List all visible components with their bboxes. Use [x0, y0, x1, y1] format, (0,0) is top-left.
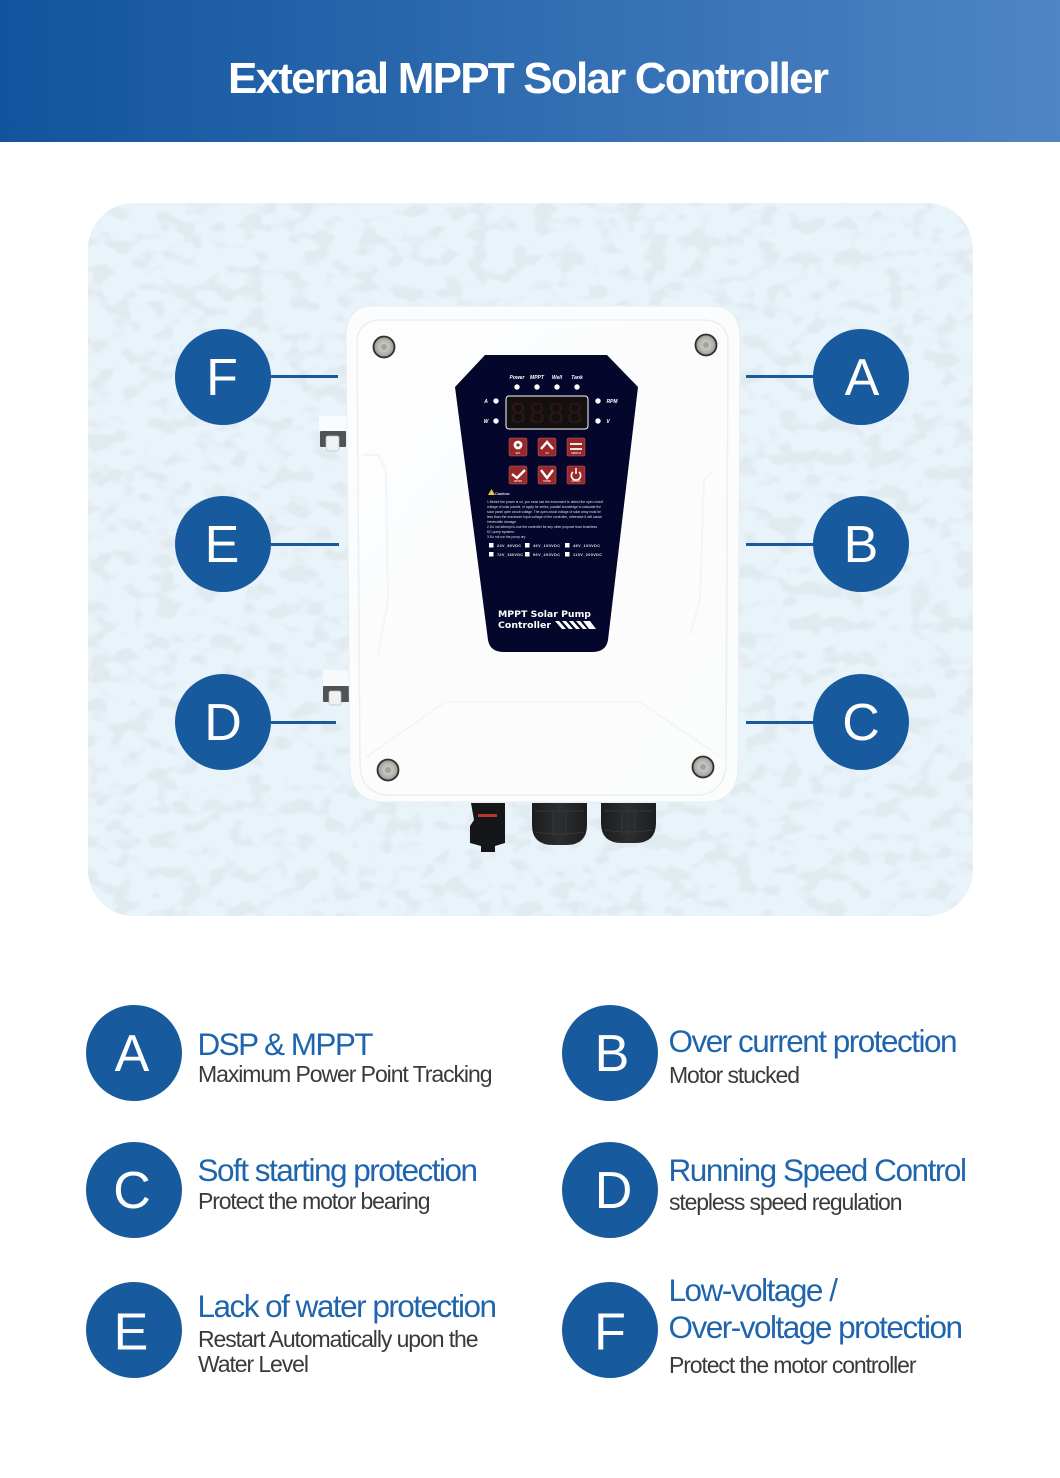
caution icon: [488, 489, 495, 495]
callout: D: D: [204, 694, 242, 752]
control buttons: UP: [545, 452, 549, 455]
feature A: Maximum Power Point Tracking: [198, 1061, 492, 1087]
indicator labels: MPPT: [530, 375, 545, 381]
caution text: voltage of solar panels, or apply for series, parallel knowledge to calculate the: [487, 505, 601, 509]
callout: E: E: [205, 516, 239, 574]
product name: MPPT Solar Pump: [498, 610, 591, 620]
feature A: DSP & MPPT: [198, 1026, 374, 1062]
control buttons: [509, 438, 585, 484]
voltage options: 72V_150VDC: [497, 553, 523, 557]
product: solar controller device: [319, 306, 740, 852]
feature D: stepless speed regulation: [669, 1189, 902, 1215]
enclosure body: [346, 306, 740, 802]
feature B: [562, 1005, 958, 1101]
voltage options: 36V_100VDC: [533, 544, 560, 548]
callout: F: F: [206, 349, 238, 407]
indicator labels: Tank: [571, 375, 583, 381]
caution text: [487, 492, 603, 539]
feature F: Protect the motor controller: [669, 1352, 917, 1378]
feature C: Soft starting protection: [198, 1152, 478, 1188]
title: External MPPT Solar Controller: [228, 54, 829, 103]
callout: D: [175, 674, 336, 770]
feature D: [562, 1142, 967, 1238]
panel: product image background: [88, 203, 973, 916]
product name: [498, 610, 596, 631]
callout: C: [746, 674, 909, 770]
voltage options: 96V_200VDC: [533, 553, 560, 557]
header banner: [0, 0, 1060, 142]
callout: E: [175, 496, 339, 592]
control buttons: ENTER: [514, 480, 522, 483]
callout: B: B: [844, 516, 878, 574]
feature E: Restart Automatically upon the: [198, 1326, 478, 1352]
feature F: Low-voltage /: [668, 1272, 838, 1308]
callout: F: [175, 329, 338, 425]
left mounting lugs: [319, 416, 351, 705]
enclosure inner lid: [357, 320, 728, 795]
voltage options: 48V_100VDC: [573, 544, 600, 548]
caution text: 2.Do not attempt to use the controller for any other purpose than brushless: [487, 525, 597, 529]
voltage options: 24V_80VDC: [497, 544, 521, 548]
indicator lights: [493, 384, 601, 424]
indicator labels: Well: [552, 375, 563, 381]
caution text: irreversible damage.: [487, 520, 517, 524]
caution text: less than the maximum input voltage of the controller, otherwise it will cause: [487, 515, 602, 519]
indicator labels: Power: [509, 375, 526, 381]
feature F: F: [594, 1304, 626, 1362]
control buttons: SWITCH: [571, 452, 581, 455]
feature E: [86, 1282, 497, 1378]
feature E: Water Level: [198, 1351, 309, 1377]
caution text: 1.Before the power is on, you must use the instrument to detect the open circuit: [487, 500, 603, 504]
feature F: Over-voltage protection: [668, 1309, 963, 1345]
callout: A: A: [845, 349, 880, 407]
caution text: DC pump systems.: [487, 530, 515, 534]
control buttons: SET: [516, 452, 521, 455]
feature C: [86, 1142, 478, 1238]
lid moulded ridges: [362, 455, 722, 758]
control buttons: ON/OFF: [571, 480, 581, 483]
feature C: Protect the motor bearing: [198, 1188, 430, 1214]
feature A: A: [115, 1025, 150, 1083]
feature E: E: [114, 1304, 148, 1362]
feature B: B: [595, 1025, 629, 1083]
bottom connectors: [470, 803, 656, 852]
voltage options: [489, 543, 602, 557]
feature F: [562, 1272, 963, 1378]
feature B: Motor stucked: [669, 1062, 800, 1088]
feature B: Over current protection: [668, 1023, 958, 1059]
callout: B: [746, 496, 909, 592]
feature E: Lack of water protection: [198, 1288, 497, 1324]
LED display: 8888: [510, 398, 583, 430]
indicator labels: [483, 375, 618, 425]
caution text: Caution:: [495, 492, 510, 496]
indicator labels: RPM: [606, 399, 618, 405]
indicator labels: V: [606, 419, 610, 425]
feature D: D: [595, 1162, 632, 1220]
feature C: C: [113, 1162, 151, 1220]
callout: C: C: [842, 694, 880, 752]
feature A: [86, 1005, 492, 1101]
voltage options: 110V_200VDC: [573, 553, 602, 557]
indicator labels: W: [484, 419, 490, 425]
indicator labels: A: [483, 399, 488, 405]
feature D: Running Speed Control: [668, 1152, 967, 1188]
screws: [374, 334, 716, 780]
caution text: 3.Do not run the pump dry.: [487, 535, 526, 539]
callout: A: [746, 329, 909, 425]
product name: Controller: [498, 621, 552, 631]
control buttons: DOWN: [543, 480, 551, 483]
caution text: solar panel open circuit voltage. The open-circuit voltage of solar array must be: [487, 510, 601, 514]
control panel: [455, 355, 638, 652]
